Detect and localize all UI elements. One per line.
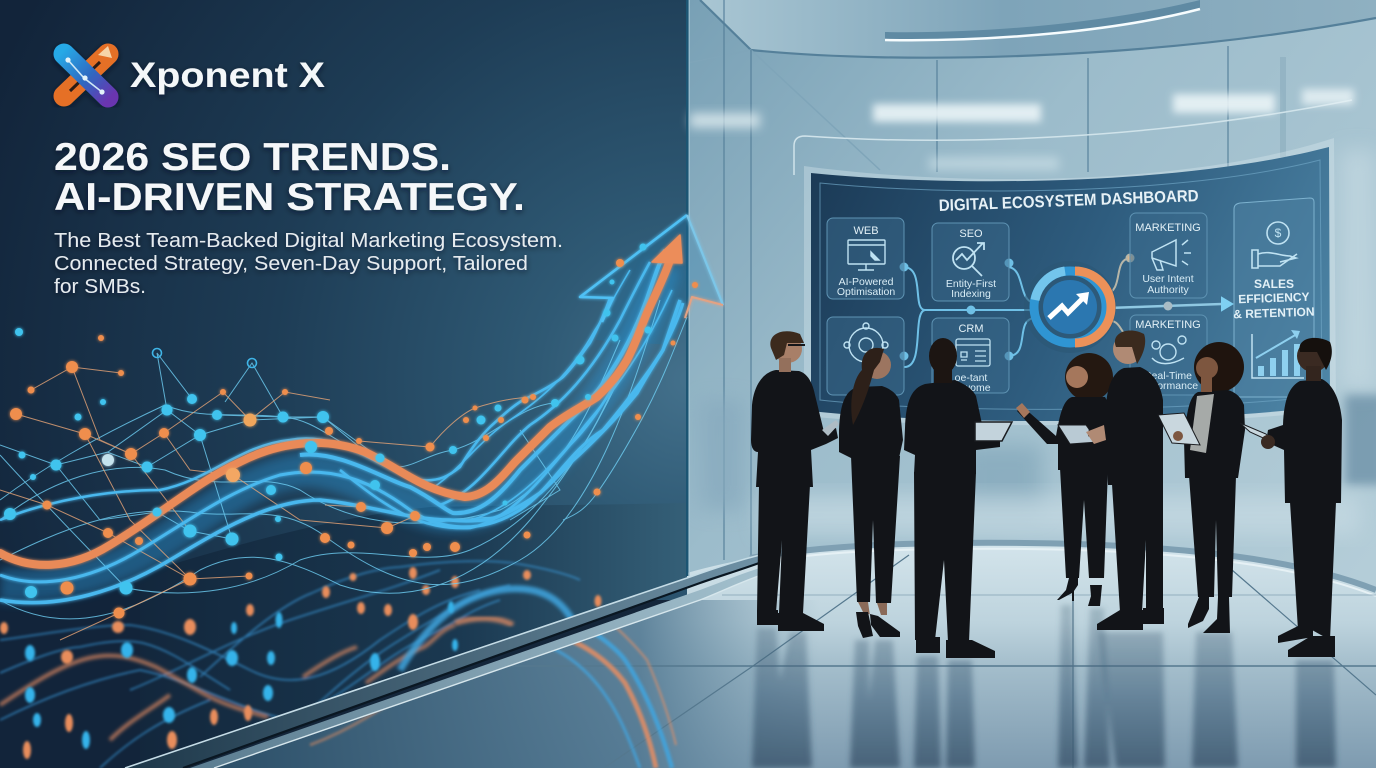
card: marketing real-time: [1130, 315, 1207, 395]
card: seo: SEO: [959, 228, 983, 240]
card: sales efficiency and retention: & RETENTION: [1233, 305, 1315, 321]
reflected nodes: [0, 567, 602, 766]
subtitle: Connected Strategy, Seven-Day Support, Tailored: [54, 253, 528, 275]
reflection: team on floor: [752, 605, 1336, 768]
ceiling light: [885, 0, 1200, 41]
person 2: woman with ponytail: [839, 348, 903, 638]
person 7: man on the right: [1240, 338, 1342, 657]
network nodes: orange: [10, 259, 698, 618]
panel: digital ecosystem dashboard screen: [804, 138, 1336, 425]
card: marketing real-time: Performance: [1138, 380, 1198, 392]
person 5: man in suit: [1086, 330, 1164, 630]
network nodes: cyan: [4, 244, 652, 598]
reflection: data wave on glass and floor: [0, 561, 676, 768]
card: marketing user intent: Authority: [1147, 284, 1189, 296]
panel: glass room background: [688, 0, 1376, 600]
card: seo: Entity-First: [946, 278, 996, 290]
card: marketing user intent: [1130, 213, 1207, 298]
card: crm: CRM: [958, 323, 984, 335]
title: [54, 136, 525, 219]
person 1: man with glasses: [751, 331, 839, 631]
subtitle: The Best Team-Backed Digital Marketing Ecosystem.: [54, 230, 563, 252]
card: crm: uswome: [951, 382, 991, 394]
card: lower left: [827, 317, 904, 395]
icon: rising arrow outer head: [580, 215, 723, 345]
brand name: Xponent X: [130, 56, 326, 95]
tablet: [1158, 413, 1200, 445]
icon: magnifier trend: [953, 243, 984, 276]
junction strip between wall and floor: [125, 0, 770, 768]
icon: brain network: [1152, 336, 1186, 364]
reflected wave on room floor: [308, 628, 678, 768]
card: marketing user intent: MARKETING: [1135, 222, 1201, 234]
card: marketing real-time: Real-Time: [1144, 370, 1192, 382]
dashboard heading: DIGITAL ECOSYSTEM DASHBOARD: [938, 187, 1199, 215]
icon: central growth dial: [1024, 261, 1116, 353]
card: crm: [932, 318, 1009, 394]
card: sales efficiency and retention: EFFICIENCY: [1238, 290, 1310, 306]
subtitle: for SMBs.: [54, 276, 146, 298]
tablet: [975, 422, 1012, 441]
icon: rising arrow outlines: [580, 215, 723, 322]
title: AI-DRIVEN STRATEGY.: [54, 176, 525, 219]
card: sales efficiency and retention: [1233, 198, 1315, 397]
card: web: Optimisation: [837, 286, 895, 298]
title: 2026 SEO TRENDS.: [54, 136, 451, 179]
person 6: woman with curly hair and tablet: [1158, 342, 1245, 633]
network nodes: rings: [152, 348, 256, 368]
icon: crm window: [956, 339, 990, 366]
card: marketing real-time: MARKETING: [1135, 319, 1201, 331]
blue ribbon strands: [0, 250, 683, 603]
card: seo: Indexing: [951, 288, 991, 300]
data wave and rising arrow: [0, 215, 723, 640]
thin network strands: [0, 300, 687, 619]
connectors: [900, 260, 1035, 367]
card: crm: oe-tant: [955, 372, 987, 384]
icon: Xponent X mark: [64, 46, 112, 97]
wide glow beneath ribbons: [0, 265, 665, 586]
logo: [64, 46, 326, 97]
panel: dark left wall: [0, 0, 688, 768]
tablet: [1058, 425, 1098, 444]
icon: dollar in hand: [1252, 222, 1297, 268]
card: web: [827, 218, 904, 299]
card: sales efficiency and retention: SALES: [1254, 277, 1294, 291]
tablet: [1240, 423, 1272, 442]
panel: reflective floor: [214, 543, 1376, 768]
card: web: AI-Powered: [839, 276, 894, 288]
reflected wave on dark wall floor: [0, 561, 580, 768]
card: web: WEB: [853, 225, 879, 237]
subtitle: [54, 230, 563, 298]
orange main ribbon: [0, 260, 670, 565]
icon: browser window: [848, 240, 885, 270]
team of seven colleagues: [751, 330, 1342, 658]
icon: orbit target: [844, 323, 888, 362]
person 3: man from behind: [904, 338, 1012, 658]
card: seo: [932, 223, 1009, 301]
card: sales efficiency and retention: $: [1275, 226, 1282, 240]
icon: connector arrow: [1222, 298, 1232, 310]
person 4: woman with curly hair: [1016, 353, 1113, 606]
card: marketing user intent: User Intent: [1142, 273, 1194, 285]
icon: megaphone: [1152, 240, 1191, 270]
icon: growth bars: [1252, 330, 1304, 378]
